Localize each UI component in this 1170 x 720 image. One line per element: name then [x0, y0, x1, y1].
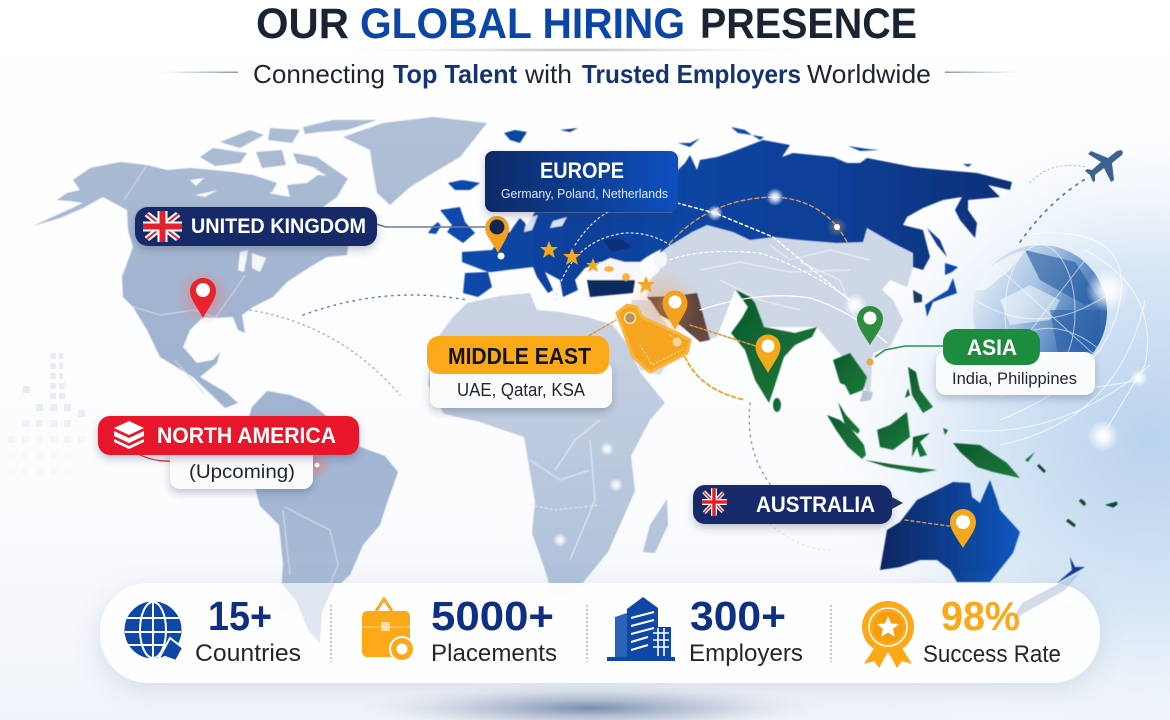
plane: top right: [1085, 150, 1123, 182]
map ghost: New Zealand trail: [1012, 572, 1081, 620]
stat: employers: 300+: [690, 593, 786, 639]
pin: China / Asia: [857, 306, 883, 366]
stat: success rate: 98%: [941, 593, 1020, 639]
title: PRESENCE: [700, 0, 917, 48]
label: United Kingdom: [135, 207, 377, 246]
map: Australia and New Zealand: [880, 480, 1085, 583]
map: Asia (grey): [647, 225, 922, 393]
pin: India: [756, 334, 780, 373]
label: Australia: [693, 485, 892, 524]
stat: countries: [125, 593, 301, 667]
title: OUR: [256, 0, 349, 48]
map: North America: [33, 117, 487, 408]
stat: placements: Placements: [431, 640, 557, 667]
stat: success rate: [862, 593, 1061, 668]
stat: countries: Countries: [195, 640, 301, 667]
subtitle: with: [524, 59, 572, 89]
label: United Kingdom: UNITED KINGDOM: [191, 215, 366, 238]
label: Australia: AUSTRALIA: [756, 492, 875, 517]
label: North America: [98, 416, 359, 489]
route sparks: [707, 188, 867, 317]
stat: success rate: Success Rate: [923, 641, 1061, 668]
map ghost: South America tip: [281, 583, 335, 643]
connector: Asia: [875, 346, 943, 357]
map: Europe: [428, 128, 690, 297]
divider: [586, 605, 588, 662]
subtitle: Worldwide: [807, 59, 931, 89]
label: North America: (Upcoming): [189, 462, 295, 483]
icon: office building: [607, 597, 675, 661]
pin: USA: [175, 268, 231, 324]
title: GLOBAL HIRING: [360, 0, 685, 48]
pin: Australia: [950, 509, 976, 548]
label: Middle East: UAE, Qatar, KSA: [457, 380, 585, 400]
stars over Europe: [540, 241, 655, 293]
stat: employers: Employers: [689, 640, 803, 667]
stat: placements: [362, 593, 557, 667]
icon: stacked layers: [114, 421, 144, 449]
connector: Australia: [892, 497, 903, 509]
divider: [330, 605, 332, 662]
icon: briefcase: [362, 599, 414, 661]
label: Europe: Germany, Poland, Netherlands: [501, 186, 668, 201]
world map: [33, 117, 1117, 612]
label: Asia: ASIA: [967, 335, 1017, 360]
label: Asia: India, Philippines: [952, 369, 1077, 388]
label: Middle East: [427, 336, 612, 408]
icon: award badge: [862, 601, 914, 668]
label: North America: NORTH AMERICA: [157, 423, 336, 448]
icon: UK flag: [143, 211, 182, 242]
icon: flag: [702, 488, 727, 516]
subtitle: Top Talent: [393, 59, 517, 89]
label: Asia: [936, 329, 1095, 395]
label: Europe: EUROPE: [540, 158, 624, 183]
route arcs: [250, 165, 1087, 550]
divider: [830, 605, 832, 662]
map: Middle East: [625, 293, 710, 375]
stats panel: [100, 572, 1100, 683]
subtitle: [160, 59, 1020, 89]
subtitle: Trusted Employers: [582, 59, 801, 89]
map: Russia and Japan: [660, 127, 1012, 317]
globe: [960, 233, 1150, 452]
icon: globe: [125, 602, 183, 661]
connector: North America: [140, 455, 172, 461]
connector: United Kingdom: [376, 224, 490, 227]
map: South America: [245, 391, 398, 612]
stat: employers: [607, 593, 803, 667]
pin: Middle East: [662, 290, 688, 330]
stat: placements: 5000+: [431, 593, 554, 639]
map: India and South-East Asia: [731, 290, 1117, 526]
title: [256, 0, 917, 52]
stat: countries: 15+: [208, 593, 272, 639]
glow: North America spark: [303, 451, 331, 479]
label: Europe: [485, 151, 678, 212]
map: Africa: [428, 293, 668, 600]
label: Middle East: MIDDLE EAST: [448, 343, 591, 369]
Arabia tag graphic: [617, 269, 701, 372]
pin: Europe: [485, 216, 509, 260]
subtitle: Connecting: [253, 59, 385, 89]
